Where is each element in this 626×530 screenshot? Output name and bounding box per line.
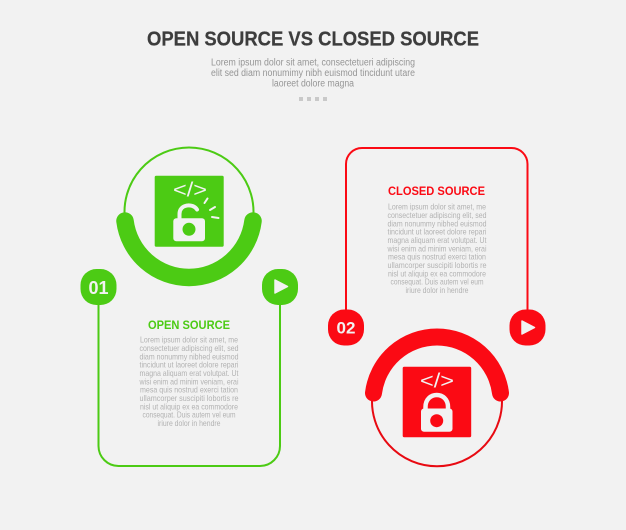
body text: open source <box>139 335 239 428</box>
badge: 01 <box>80 269 116 305</box>
title: OPEN SOURCE VS CLOSED SOURCE <box>147 28 479 51</box>
subtitle text block: Lorem ipsum dolor sit amet, consectetueri adipiscing <box>211 58 415 68</box>
badge: 02: 02 <box>337 319 355 338</box>
body text: open source: wisi enim ad minim veniam, erai <box>139 376 239 386</box>
body text: closed source: consequat. Duis autem vel eum <box>390 277 484 287</box>
panel outline: closed source <box>346 148 528 312</box>
title divider dots <box>299 97 327 101</box>
body text: closed source: ullamcorper suscipiti lobortis re <box>388 260 487 270</box>
subtitle text block <box>211 58 415 89</box>
heading: open source: OPEN SOURCE <box>148 320 230 332</box>
panel: closed source <box>328 148 546 466</box>
thick arc: open source <box>125 221 253 277</box>
body text: closed source: nisl ut aliquip ex ea commodore <box>388 268 486 278</box>
body text: open source: magna aliquam erat volutpat. Ut <box>140 368 239 378</box>
thick arc: closed source <box>374 337 500 393</box>
body text: closed source: iriure dolor in hendre <box>406 285 469 295</box>
heading: closed source: CLOSED SOURCE <box>388 186 485 198</box>
body text: closed source: mesa quis nostrud exerci tation <box>388 252 486 262</box>
icon: open padlock with code <box>155 176 224 247</box>
play button: closed source <box>510 310 546 346</box>
body text: open source: nisl ut aliquip ex ea commodore <box>140 401 238 411</box>
body text: open source: tincidunt ut laoreet dolore repari <box>140 360 239 370</box>
icon: closed padlock with code <box>403 367 471 437</box>
subtitle text block: elit sed diam nonumimy nibh euismod tincidunt utare <box>211 68 415 79</box>
panel outline: open source <box>98 303 280 466</box>
body text: open source: consectetuer adipiscing elit, sed <box>140 343 239 353</box>
icon: open padlock with code: </> <box>173 180 207 202</box>
badge: 02 <box>328 310 364 346</box>
body text: open source: consequat. Duis autem vel eum <box>142 410 236 420</box>
body text: closed source: Lorem ipsum dolor sit amet, me <box>388 202 486 212</box>
play button: open source <box>262 269 298 305</box>
body text: open source: Lorem ipsum dolor sit amet, me <box>140 335 238 345</box>
badge: 01: 01 <box>88 278 109 298</box>
thin circle arc: open source <box>124 147 254 220</box>
body text: closed source: diam nonummy nibhed euismod <box>388 218 487 228</box>
thin circle arc: closed source <box>372 395 502 466</box>
body text: open source: iriure dolor in hendre <box>158 418 221 428</box>
subtitle text block: laoreet dolore magna <box>272 78 354 89</box>
body text: closed source: consectetuer adipiscing elit, sed <box>388 210 487 220</box>
body text: open source: diam nonummy nibhed euismod <box>140 351 239 361</box>
icon: closed padlock with code: </> <box>420 370 454 392</box>
body text: closed source: magna aliquam erat volutpat. Ut <box>388 235 487 245</box>
panel: open source <box>80 147 298 466</box>
body text: closed source <box>387 202 487 295</box>
body text: closed source: wisi enim ad minim veniam, erai <box>387 243 487 253</box>
body text: open source: mesa quis nostrud exerci tation <box>140 385 238 395</box>
body text: closed source: tincidunt ut laoreet dolore repari <box>388 227 487 237</box>
body text: open source: ullamcorper suscipiti lobortis re <box>140 393 239 403</box>
